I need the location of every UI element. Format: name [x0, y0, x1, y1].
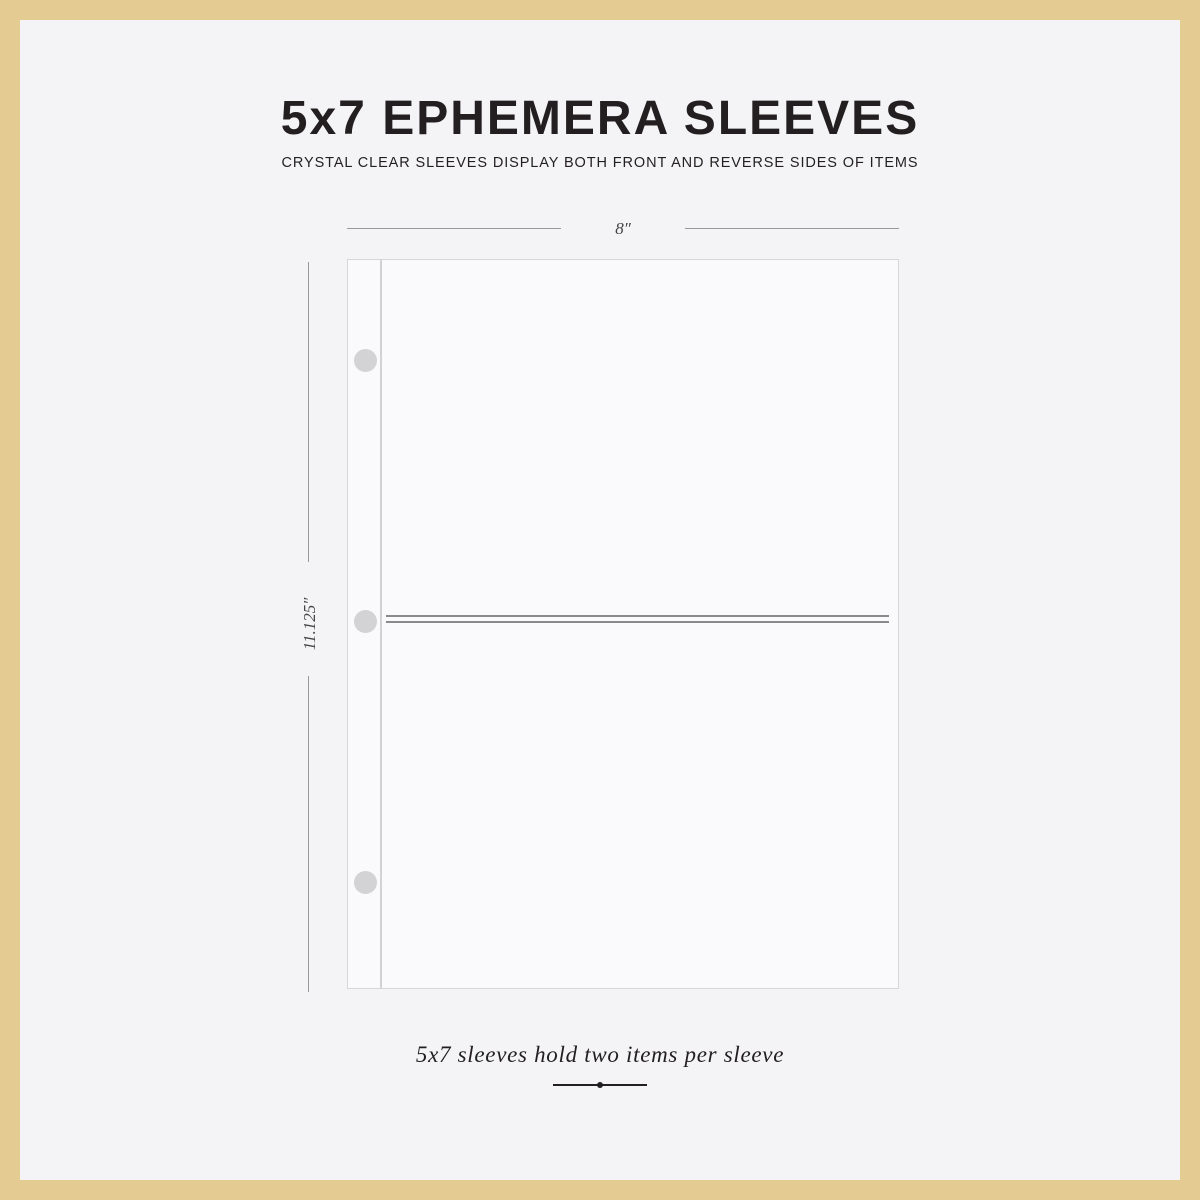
caption: 5x7 sleeves hold two items per sleeve	[416, 1042, 784, 1067]
ornament	[553, 1082, 647, 1088]
binding strip	[380, 260, 382, 988]
width dimension: 8″	[615, 219, 631, 238]
subtitle: CRYSTAL CLEAR SLEEVES DISPLAY BOTH FRONT AND REVERSE SIDES OF ITEMS	[282, 155, 918, 171]
holes	[354, 349, 377, 372]
sleeve page	[347, 259, 899, 989]
divider seam	[386, 615, 889, 617]
height dimension: 11.125″	[300, 598, 319, 650]
title: 5x7 EPHEMERA SLEEVES	[281, 92, 919, 145]
